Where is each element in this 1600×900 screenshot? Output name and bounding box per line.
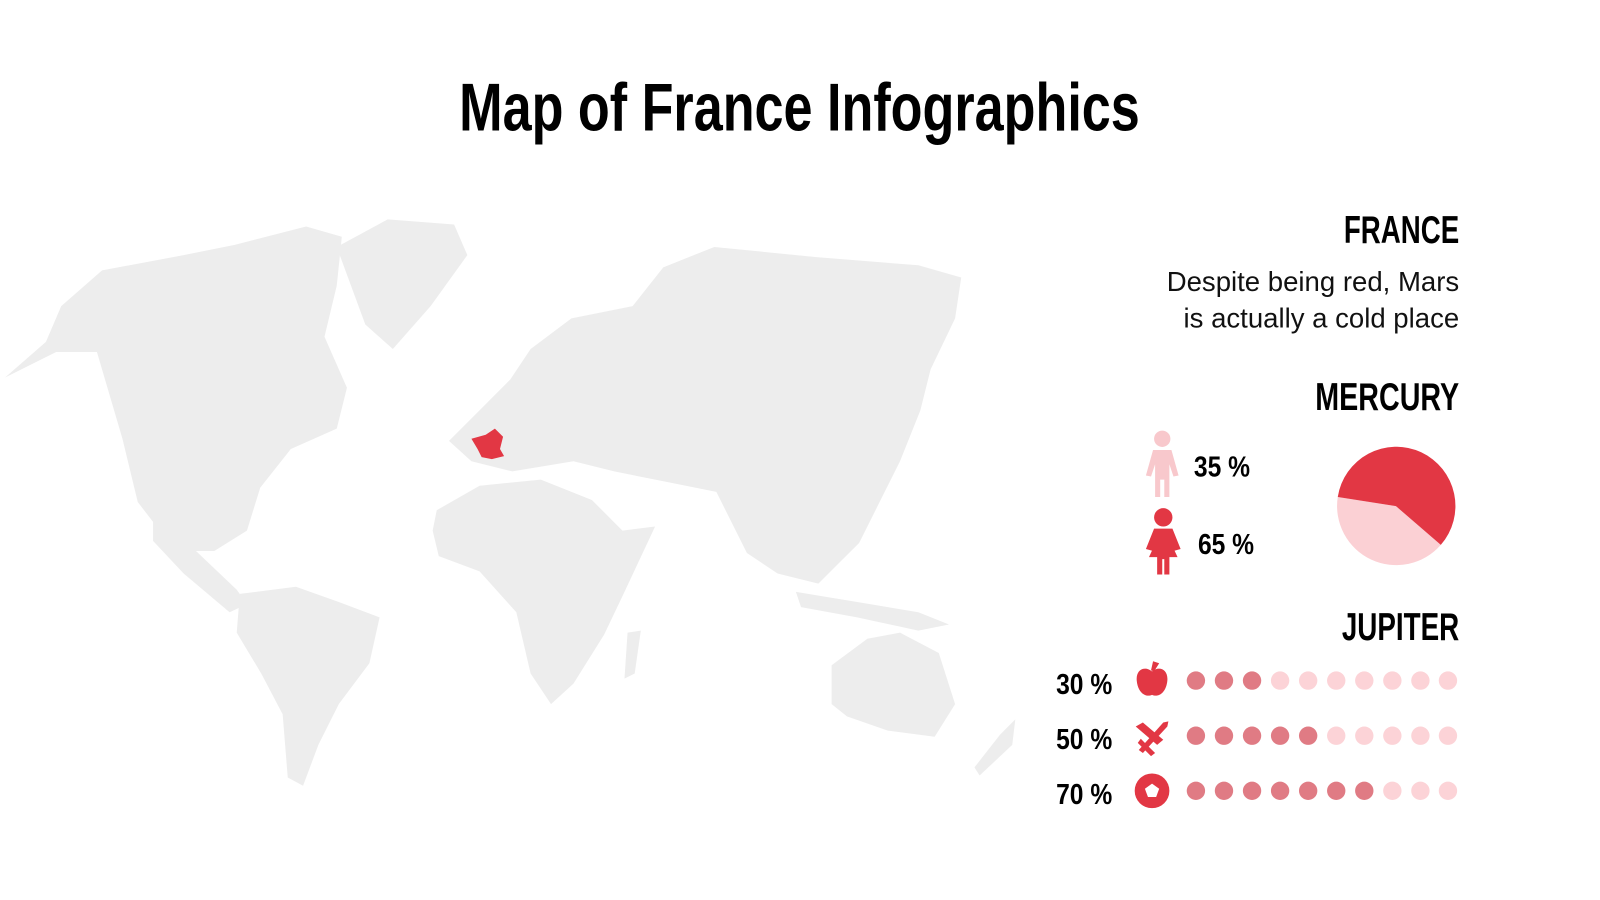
north america	[5, 227, 347, 551]
icon: apple	[1137, 661, 1167, 696]
stats labels	[1056, 669, 1112, 811]
greenland	[337, 219, 467, 349]
africa	[433, 480, 655, 704]
title: Map of France Infographics	[459, 71, 1140, 146]
australia	[832, 633, 955, 737]
heading: France: FRANCE	[1344, 209, 1459, 252]
stat: 65%: 65 %	[1198, 529, 1254, 561]
icon: ball	[1135, 773, 1169, 808]
central america	[153, 510, 247, 612]
world map	[5, 219, 1015, 786]
text block: description: Despite being red, Mars	[1167, 266, 1459, 297]
stats labels: 70 %	[1056, 779, 1112, 811]
icon: woman	[1146, 508, 1181, 574]
heading: Mercury: MERCURY	[1315, 376, 1459, 419]
south america	[237, 587, 380, 786]
stat: 35%: 35 %	[1194, 452, 1250, 484]
heading: Jupiter: JUPITER	[1342, 606, 1459, 649]
dot rows	[1187, 671, 1457, 800]
icon: man	[1146, 431, 1179, 497]
stats labels: 50 %	[1056, 724, 1112, 756]
text block: description	[1167, 266, 1459, 334]
icon: plane	[1136, 721, 1168, 756]
france highlight	[471, 429, 504, 459]
text block: description: is actually a cold place	[1184, 303, 1459, 334]
eurasia	[449, 247, 961, 584]
stats labels: 30 %	[1056, 669, 1112, 701]
pie chart	[1337, 447, 1455, 565]
